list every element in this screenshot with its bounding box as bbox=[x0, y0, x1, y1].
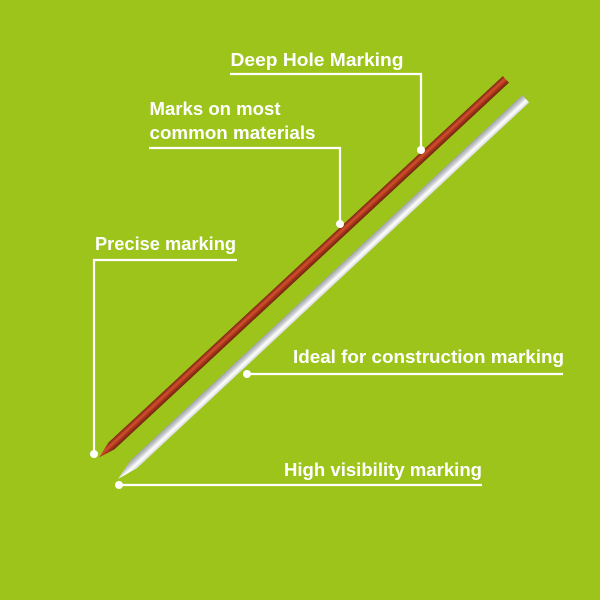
callout: marks on most common materials: common materials bbox=[150, 123, 316, 143]
callout: ideal for construction marking bbox=[243, 347, 564, 378]
callout: deep hole marking bbox=[230, 50, 425, 154]
callout: high visibility marking bbox=[115, 460, 482, 489]
silver marker bbox=[115, 95, 529, 483]
callout: ideal for construction marking: Ideal for construction marking bbox=[293, 347, 564, 367]
callout: precise marking bbox=[90, 234, 237, 458]
callout: marks on most common materials: Marks on most bbox=[150, 99, 281, 119]
callout: deep hole marking: Deep Hole Marking bbox=[230, 50, 404, 70]
callout: marks on most common materials bbox=[149, 99, 344, 228]
callout: precise marking: Precise marking bbox=[95, 234, 236, 254]
callout: high visibility marking: High visibility marking bbox=[284, 460, 482, 480]
red marker bbox=[96, 76, 509, 461]
